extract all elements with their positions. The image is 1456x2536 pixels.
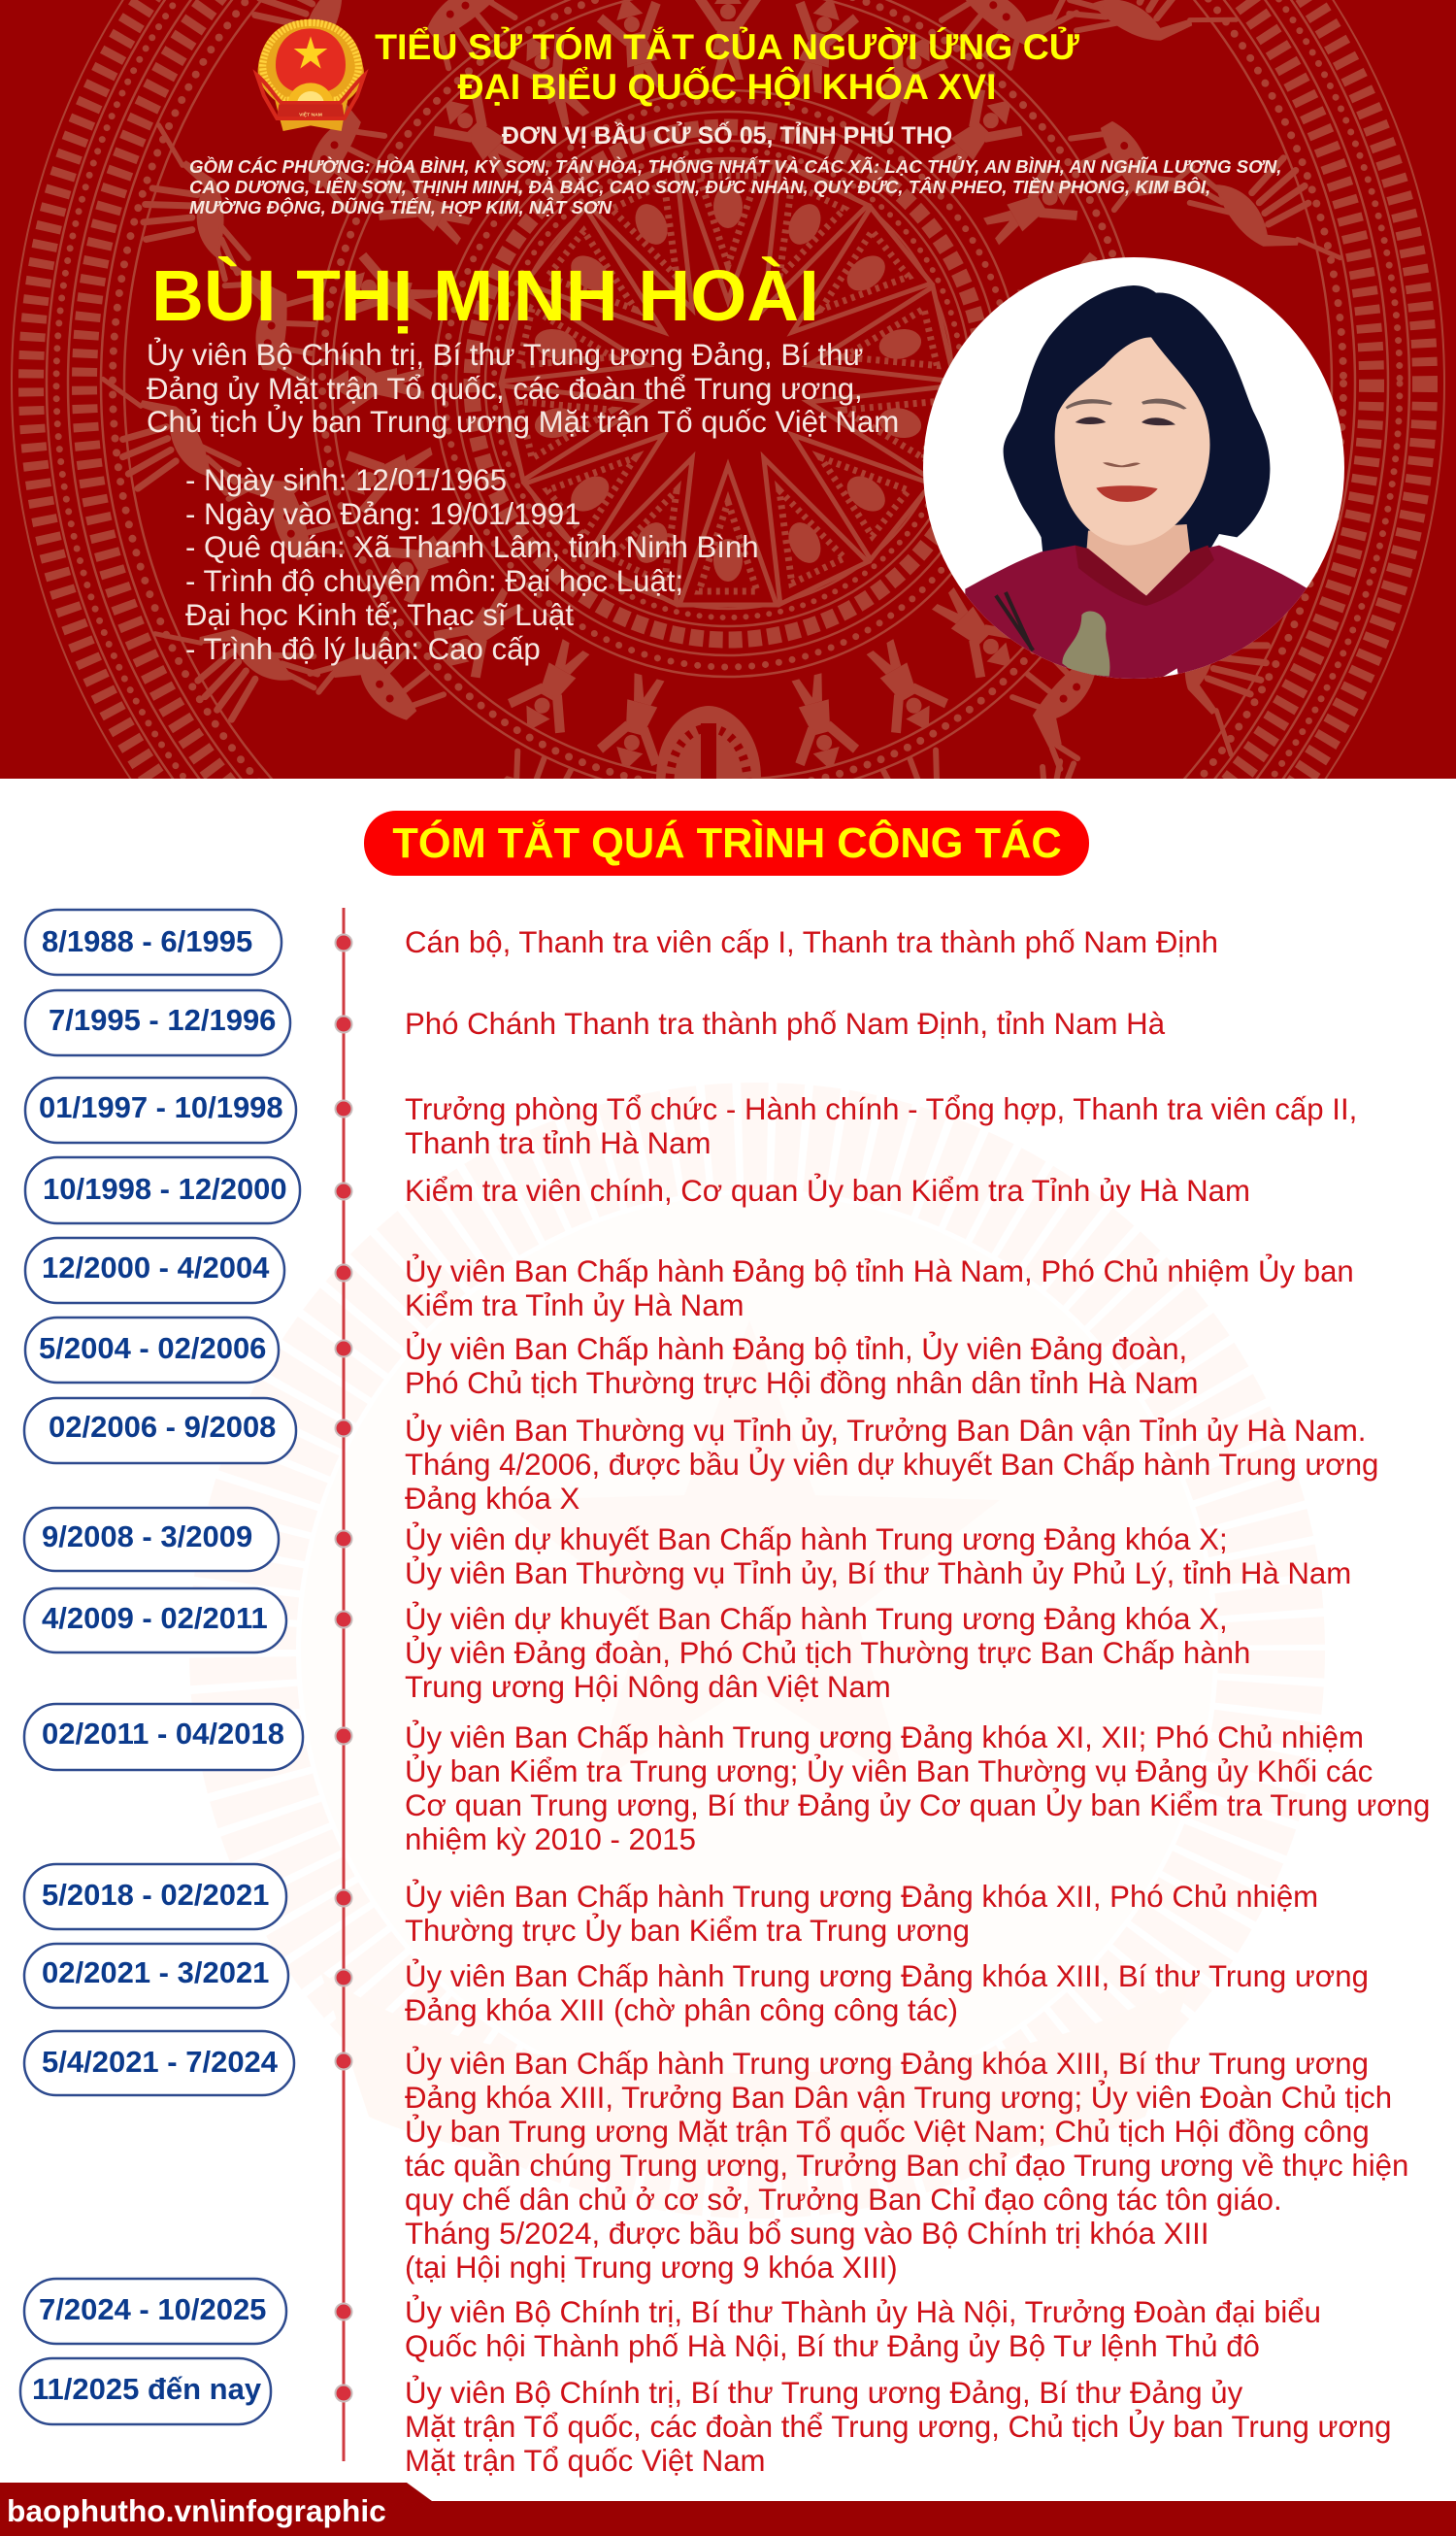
timeline row 12: 02/2021 - 3/2021 [42,1955,269,1989]
timeline row 12: Ủy viên Ban Chấp hành Trung ương Đảng khóa XIII, Bí thư Trung ương [405,1958,1369,1993]
timeline row 5 [25,1238,1354,1322]
timeline row 6: Phó Chủ tịch Thường trực Hội đồng nhân dân tỉnh Hà Nam [405,1366,1199,1400]
timeline row 14 [24,2279,1321,2363]
timeline row 14: 7/2024 - 10/2025 [39,2292,266,2326]
timeline row 3: Thanh tra tỉnh Hà Nam [405,1126,711,1160]
candidate details: - Ngày sinh: 12/01/1965 [185,463,507,497]
timeline row 3: 01/1997 - 10/1998 [39,1090,283,1124]
candidate details: - Trình độ lý luận: Cao cấp [185,632,541,666]
constituency wards list: GỒM CÁC PHƯỜNG: HÒA BÌNH, KỲ SƠN, TÂN HÒA, THỐNG NHẤT VÀ CÁC XÃ: LẠC THỦY, AN BÌNH, AN NGHĨA LƯƠNG SƠN, [189,156,1281,177]
timeline row 13: quy chế dân chủ ở cơ sở, Trưởng Ban Chỉ đạo công tác tôn giáo. [405,2183,1282,2217]
section heading: work history: TÓM TẮT QUÁ TRÌNH CÔNG TÁC [392,819,1062,867]
timeline axis [342,908,346,2461]
timeline row 11: Thường trực Ủy ban Kiểm tra Trung ương [405,1913,970,1948]
watermark: faint emblem behind timeline [243,1136,1272,2175]
icon: national emblem [257,19,364,131]
timeline row 8: 9/2008 - 3/2009 [42,1519,252,1553]
timeline row 10: 02/2011 - 04/2018 [42,1717,284,1751]
timeline row 4 [25,1157,1250,1223]
timeline row 10: nhiệm kỳ 2010 - 2015 [405,1822,696,1856]
title [375,26,1080,107]
timeline row 11: 5/2018 - 02/2021 [42,1878,269,1912]
constituency wards list: CAO DƯƠNG, LIÊN SƠN, THỊNH MINH, ĐÀ BẮC, CAO SƠN, ĐỨC NHÀN, QUY ĐỨC, TÂN PHEO, TIỀN PHONG, KIM BÔI, [189,177,1210,197]
timeline row 15: 11/2025 đến nay [32,2372,262,2406]
timeline row 6: 5/2004 - 02/2006 [39,1331,266,1365]
timeline row 15: Ủy viên Bộ Chính trị, Bí thư Trung ương Đảng, Bí thư Đảng ủy [405,2375,1243,2410]
title: ĐẠI BIỂU QUỐC HỘI KHÓA XVI [458,66,996,107]
timeline row 3: Trưởng phòng Tổ chức - Hành chính - Tổng hợp, Thanh tra viên cấp II, [405,1092,1357,1126]
timeline row 9: 4/2009 - 02/2011 [42,1601,268,1635]
timeline row 10: Ủy ban Kiểm tra Trung ương; Ủy viên Ban Thường vụ Đảng ủy Khối các [405,1753,1373,1788]
timeline row 13: 5/4/2021 - 7/2024 [42,2045,279,2079]
candidate details [185,463,759,666]
candidate name: BÙI THỊ MINH HOÀI [151,254,819,336]
timeline row 7: Đảng khóa X [405,1482,580,1516]
timeline row 13: Tháng 5/2024, được bầu bổ sung vào Bộ Chính trị khóa XIII [405,2217,1208,2251]
timeline row 2: 7/1995 - 12/1996 [49,1003,276,1037]
timeline row 12 [24,1944,1369,2027]
constituency heading: ĐƠN VỊ BẦU CỬ SỐ 05, TỈNH PHÚ THỌ [502,120,952,150]
timeline row 6: Ủy viên Ban Chấp hành Đảng bộ tỉnh, Ủy viên Đảng đoàn, [405,1331,1187,1366]
timeline row 1 [25,910,1218,975]
timeline row 10 [24,1704,1430,1856]
timeline row 9 [24,1588,1250,1704]
section heading: work history [364,811,1089,876]
constituency wards list: MƯỜNG ĐỘNG, DŨNG TIẾN, HỢP KIM, NẬT SƠN [189,197,612,217]
timeline row 14: Quốc hội Thành phố Hà Nội, Bí thư Đảng ủy Bộ Tư lệnh Thủ đô [405,2329,1260,2363]
timeline row 2: Phó Chánh Thanh tra thành phố Nam Định, tỉnh Nam Hà [405,1007,1166,1041]
timeline row 7 [24,1398,1378,1516]
timeline row 13: tác quần chúng Trung ương, Trưởng Ban chỉ đạo Trung ương về thực hiện [405,2149,1408,2183]
timeline row 8: Ủy viên Ban Thường vụ Tỉnh ủy, Bí thư Thành ủy Phủ Lý, tỉnh Hà Nam [405,1555,1351,1590]
timeline row 7: Ủy viên Ban Thường vụ Tỉnh ủy, Trưởng Ban Dân vận Tỉnh ủy Hà Nam. [405,1413,1366,1448]
candidate details: - Ngày vào Đảng: 19/01/1991 [185,497,580,531]
timeline row 11 [24,1864,1318,1948]
timeline row 13: Ủy viên Ban Chấp hành Trung ương Đảng khóa XIII, Bí thư Trung ương [405,2046,1369,2081]
timeline row 9: Ủy viên Đảng đoàn, Phó Chủ tịch Thường trực Ban Chấp hành [405,1635,1250,1670]
timeline row 2 [25,990,1166,1055]
timeline row 10: Ủy viên Ban Chấp hành Trung ương Đảng khóa XI, XII; Phó Chủ nhiệm [405,1719,1364,1754]
timeline row 6 [25,1318,1199,1400]
portrait photo [923,257,1344,706]
candidate positions: Chủ tịch Ủy ban Trung ương Mặt trận Tổ quốc Việt Nam [147,404,899,439]
candidate details: Đại học Kinh tế; Thạc sĩ Luật [185,598,574,632]
candidate details: - Trình độ chuyên môn: Đại học Luật; [185,564,683,598]
title: TIỂU SỬ TÓM TẮT CỦA NGƯỜI ỨNG CỬ [375,26,1080,67]
timeline row 1: 8/1988 - 6/1995 [42,924,252,958]
timeline row 5: 12/2000 - 4/2004 [42,1251,270,1285]
timeline row 5: Ủy viên Ban Chấp hành Đảng bộ tỉnh Hà Nam, Phó Chủ nhiệm Ủy ban [405,1253,1354,1288]
timeline row 13: (tại Hội nghị Trung ương 9 khóa XIII) [405,2251,898,2285]
timeline row 5: Kiểm tra Tỉnh ủy Hà Nam [405,1288,745,1322]
constituency wards list [189,156,1281,217]
timeline row 9: Trung ương Hội Nông dân Việt Nam [405,1670,891,1704]
candidate positions: Ủy viên Bộ Chính trị, Bí thư Trung ương Đảng, Bí thư [147,337,863,372]
timeline row 14: Ủy viên Bộ Chính trị, Bí thư Thành ủy Hà Nội, Trưởng Đoàn đại biểu [405,2294,1321,2329]
candidate details: - Quê quán: Xã Thanh Lâm, tỉnh Ninh Bình [185,530,759,564]
timeline row 4: 10/1998 - 12/2000 [43,1172,287,1206]
timeline row 7: Tháng 4/2006, được bầu Ủy viên dự khuyết Ban Chấp hành Trung ương [405,1447,1378,1482]
timeline row 15 [20,2358,1392,2478]
timeline row 3 [25,1078,1357,1160]
candidate positions: Đảng ủy Mặt trận Tổ quốc, các đoàn thể Trung ương, [147,372,863,406]
timeline row 13: Ủy ban Trung ương Mặt trận Tổ quốc Việt Nam; Chủ tịch Hội đồng công [405,2114,1370,2149]
timeline row 13 [24,2031,1408,2285]
timeline row 7: 02/2006 - 9/2008 [49,1410,276,1444]
timeline row 11: Ủy viên Ban Chấp hành Trung ương Đảng khóa XII, Phó Chủ nhiệm [405,1879,1318,1914]
timeline row 13: Đảng khóa XIII, Trưởng Ban Dân vận Trung ương; Ủy viên Đoàn Chủ tịch [405,2080,1392,2115]
footer bar: baophutho.vn\infographic [7,2493,386,2528]
timeline row 15: Mặt trận Tổ quốc, các đoàn thể Trung ương, Chủ tịch Ủy ban Trung ương [405,2409,1392,2444]
timeline row 8: Ủy viên dự khuyết Ban Chấp hành Trung ương Đảng khóa X; [405,1521,1228,1556]
timeline row 4: Kiểm tra viên chính, Cơ quan Ủy ban Kiểm tra Tỉnh ủy Hà Nam [405,1173,1250,1208]
timeline row 10: Cơ quan Trung ương, Bí thư Đảng ủy Cơ quan Ủy ban Kiểm tra Trung ương [405,1787,1430,1822]
footer bar [0,2483,1456,2536]
timeline row 8 [24,1508,1351,1590]
timeline row 15: Mặt trận Tổ quốc Việt Nam [405,2444,766,2478]
hero banner background [0,0,1456,779]
candidate positions [147,337,899,439]
timeline row 12: Đảng khóa XIII (chờ phân công công tác) [405,1993,958,2027]
timeline row 1: Cán bộ, Thanh tra viên cấp I, Thanh tra thành phố Nam Định [405,925,1218,959]
icon: national emblem: VIỆT NAM [299,110,322,117]
timeline row 9: Ủy viên dự khuyết Ban Chấp hành Trung ương Đảng khóa X, [405,1601,1228,1636]
